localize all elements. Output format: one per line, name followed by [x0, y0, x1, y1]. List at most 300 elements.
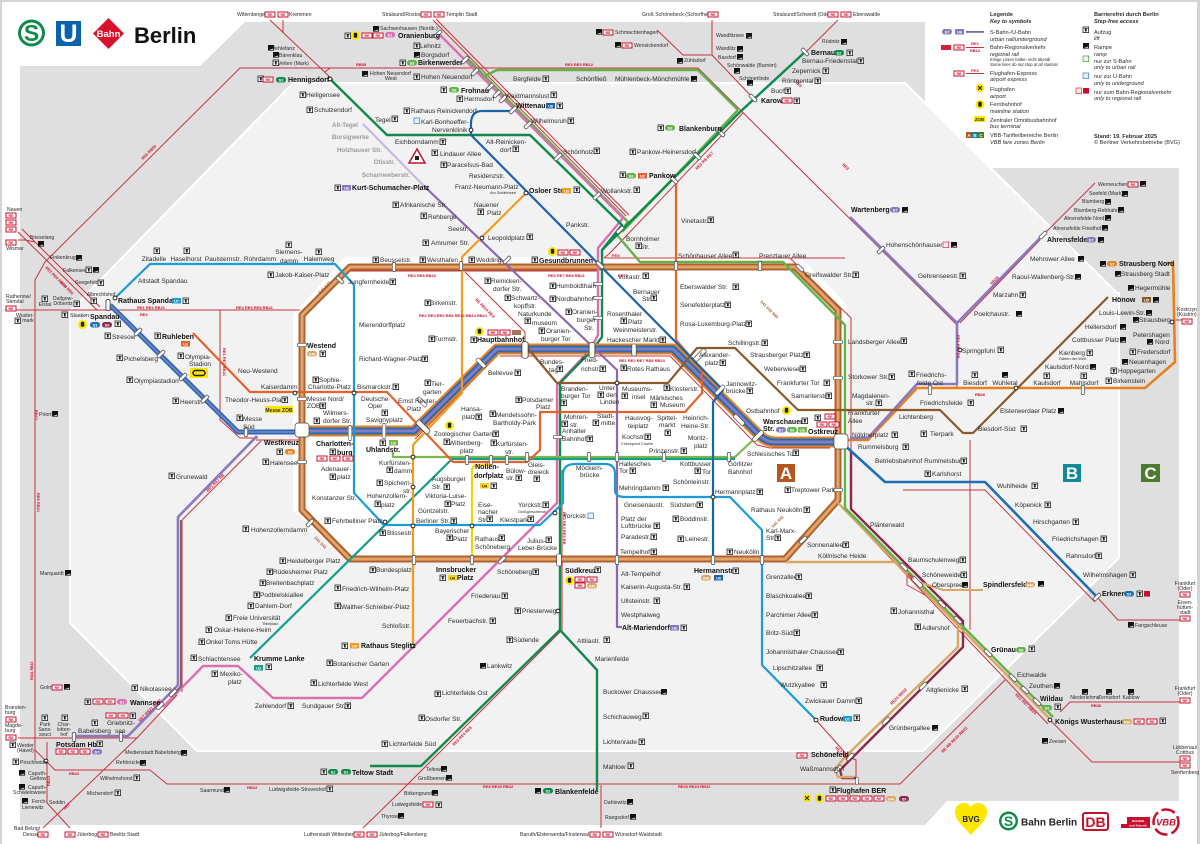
stations: north west outskirts: Wensickendorf — [634, 43, 669, 49]
stations: north west outskirts: Stendal — [6, 299, 24, 305]
legend: key to symbols: Some lines do not stop at all stations — [990, 62, 1059, 67]
stations: east: Blumberg-Rehhahn — [1074, 208, 1119, 214]
stations: east: Raoul-Wallenberg-Str. — [1012, 274, 1076, 281]
stations: inner west: tag — [549, 367, 558, 374]
stations: inner east: Museum — [660, 402, 685, 409]
stations: east: Hohenschönhausen — [886, 242, 944, 249]
legend: step-free access: Barrierefrei durch Berlin — [1094, 12, 1159, 18]
stations: south west: hof — [60, 732, 68, 738]
stations: north west outskirts: Bärenklau — [279, 53, 302, 59]
stations: inner west: Blissestr. — [387, 530, 413, 537]
stations: east: Mahlsdorf — [1070, 380, 1098, 387]
stations: Spandau and west: damm — [280, 258, 298, 265]
stations: south west: Babelsberg — [78, 728, 111, 735]
regional route labels: RE7 — [618, 273, 627, 278]
stations: south: Wutzkyallee — [780, 682, 815, 689]
stations: east: Strausberg Stadt — [1121, 271, 1170, 278]
stations: inner east: Klosterstr. — [670, 386, 699, 393]
line: S-Bahn Stadtbahn outer — [303, 349, 841, 442]
stations: inner east: Rathaus Neukölln — [751, 507, 803, 514]
stations: north west outskirts: Wandlitz — [716, 46, 736, 52]
stations: Spandau and west: Altstadt Spandau — [138, 278, 188, 285]
stations: Spandau and west: Spandau — [90, 314, 120, 321]
stations: north: Borgsdorf — [421, 52, 449, 59]
line: S8 south-east — [617, 235, 1053, 717]
stations: north west outskirts: West — [385, 76, 397, 82]
footer logos — [955, 803, 1178, 835]
legend: key to symbols: Flughafen-Express — [990, 71, 1037, 77]
stations: inner east: Alexander- — [699, 352, 730, 359]
line: U5 — [525, 297, 1108, 433]
stations: north: Wollankstr. — [601, 188, 633, 195]
stations: south west: Wilhelmshorst — [100, 776, 133, 782]
stations: inner east: Samariterstr. — [791, 393, 828, 400]
stations: south east: Fangschleuse — [1135, 623, 1167, 629]
stations: south: Alt-Tempelhof — [621, 571, 661, 578]
stations: south: Wünsdorf-Waldstadt — [615, 832, 662, 838]
stations: inner west: Platz — [451, 501, 465, 508]
stations: north: Scharnweberstr. — [362, 172, 410, 179]
stations: south west: Ferch- — [32, 799, 47, 805]
stations: inner west: platz — [337, 474, 351, 481]
stations: north: Eichborndamm — [395, 139, 439, 146]
stations: inner west: burger Tor — [541, 336, 571, 343]
regional route labels: RE2 RE7 RB24 — [1014, 692, 1038, 716]
stations: north: Wilhelmsruh — [531, 118, 567, 125]
stations: inner east: Ostkreuz — [808, 429, 838, 436]
fare zone letter C — [1141, 464, 1160, 483]
stations: south east: hütten- — [1177, 605, 1193, 611]
stations: east: Birkenstein — [1113, 378, 1146, 385]
stations: south west: Griebnitz- — [107, 720, 135, 727]
stations: north west outskirts: Döberitz — [53, 301, 73, 307]
stations: north west outskirts: Staaken — [70, 313, 89, 319]
logo: S-Bahn Berlin: S — [1004, 813, 1013, 829]
stations: south: Rangsdorf — [605, 815, 629, 821]
line: S3 west — [110, 305, 303, 432]
stations: south west: Rüdesheimer Platz — [273, 569, 328, 576]
stations: north: Buch — [771, 88, 786, 95]
stations: inner west: Oranien- — [572, 309, 597, 316]
stations: east: Ahrensfelde Friedhof — [1053, 226, 1102, 232]
legend: key to symbols: bus terminal — [990, 124, 1021, 130]
stations: inner east: Mehringdamm — [619, 485, 661, 492]
stations: south west: Ludwigsfelde-Struveshof — [269, 787, 326, 793]
stations: north: Zepernick — [792, 68, 821, 75]
stations: Spandau and west: Messe ZOB — [265, 408, 293, 414]
stations: south east: Niederlehme — [1070, 695, 1100, 701]
stations: north: Oranienburg — [398, 33, 440, 40]
stations: inner west: Viktoria-Luise- — [425, 493, 466, 500]
fare zone letter A: A — [780, 464, 792, 483]
warning triangle icon — [409, 149, 425, 163]
legend: key to symbols: Einige Linien halten nicht überall — [990, 57, 1050, 62]
regional route labels: RE3 RE4 RE5 — [451, 725, 473, 747]
stations: inner west: Reinicken- — [491, 278, 522, 285]
line: U2 — [193, 183, 702, 462]
stations: inner west: Spichern- — [384, 480, 412, 487]
stations: north: Heiligensee — [306, 92, 340, 99]
stations: inner east: Branden- — [561, 386, 588, 393]
stations: south east: Eisen- — [1178, 600, 1193, 606]
stations: inner east: mitte — [601, 420, 615, 427]
stations: north: Schönholz — [563, 149, 593, 156]
regional route labels: RE20 RE24 RB32 — [678, 784, 711, 789]
stations: north west outskirts: Schönerlinde — [739, 76, 769, 82]
stations: Spandau and west: Ruhleben — [162, 334, 194, 341]
stations: inner east: Rotes Rathaus — [627, 366, 671, 373]
stations: east: Mehrower Allee — [1030, 256, 1075, 263]
stations: south west: lotten- — [57, 727, 71, 733]
stations: south west: Schwielowsee — [13, 790, 46, 796]
stations: north: Prenzlauer Allee — [759, 253, 807, 260]
line: S8 north — [467, 60, 738, 110]
stations: north: Otisstr. — [374, 159, 395, 166]
stations: south: Friedenau — [471, 593, 501, 600]
stations: north: Birkenwerder — [418, 60, 463, 67]
stations: north: Platz — [487, 210, 501, 217]
stations: south: Zwickauer Damm — [805, 698, 856, 705]
line: U9 — [413, 193, 526, 645]
stations: south: Lichterfelde Süd — [389, 741, 436, 748]
stations: north west outskirts: mark — [22, 318, 34, 324]
stations: inner west: kopffstr. — [514, 303, 537, 310]
stations: south: Lipschitzallee — [773, 665, 812, 672]
line: U3 — [250, 459, 735, 658]
stations: inner west: Bartholdy-Park — [493, 420, 537, 427]
logo: Bahn diamond — [93, 18, 124, 49]
legend: key to symbols: A — [967, 133, 971, 138]
stations: north: Karow — [761, 98, 783, 105]
stations: east: Strausberg — [1139, 317, 1171, 324]
stations: east: Lichtenberg — [899, 414, 933, 421]
stations: south: Lichtenrade — [603, 739, 637, 746]
stations: inner west: Hauptbahnhof — [477, 337, 525, 344]
stations: north west outskirts: Falkensee — [63, 268, 87, 274]
stations: east: Frankfurter — [848, 410, 881, 417]
stations: north west outskirts: Wittenberge — [237, 12, 265, 18]
stations: inner west: Eise- — [478, 502, 493, 509]
stations: inner west: Str. — [432, 484, 442, 491]
fare zone letter B — [1063, 464, 1081, 483]
legend: step-free access: ramp — [1094, 52, 1107, 58]
regional route labels: RE24 RB22 — [889, 687, 908, 706]
stations: south: Teltow — [426, 767, 441, 773]
logo: Bahn diamond: Bahn — [97, 29, 121, 40]
stations: south east: Oberspree — [932, 582, 963, 589]
stations: north: Afrikanische Str. — [400, 202, 447, 209]
line: S1 — [163, 33, 623, 707]
stations: east: Hegermühle — [1135, 285, 1171, 292]
stations: east: str. — [866, 400, 875, 407]
stations: inner east: Sonnenallee — [807, 542, 844, 549]
stations: inner east: Platz — [628, 319, 642, 326]
stations: inner east: Checkpoint Charlie — [621, 442, 653, 446]
stations: south east: Karlshorst — [932, 471, 961, 478]
stations: north: Rehberge — [428, 214, 457, 221]
stations: south west: see — [115, 728, 126, 735]
logo: Mobilität Verkehrsverbund: und Zukunft — [1129, 824, 1147, 828]
stations: south east: Hirschgarten — [1033, 519, 1070, 526]
stations: inner west: Deutsche — [361, 396, 389, 403]
stations: south east: Königs Wusterhausen — [1055, 719, 1129, 726]
stations: south west: Werder — [17, 743, 34, 749]
stations: south east: Baumschulenweg — [908, 557, 960, 564]
stations: south east: Zernsdorf — [1098, 695, 1121, 701]
stations: south west: Krumme Lanke — [254, 656, 305, 663]
stations: inner east: markt — [659, 422, 675, 429]
regional route labels: RB23 — [46, 775, 51, 786]
legend: step-free access: Rampe — [1094, 45, 1112, 51]
stations: Spandau and west: Paulsternstr. — [205, 256, 241, 263]
stations: Spandau and west: Halensee — [270, 460, 298, 467]
stations: inner east: Hallesches — [619, 461, 652, 468]
stations: south: Buckower Chaussee — [603, 689, 663, 696]
logo: VBB: VBB — [1156, 818, 1176, 828]
line: U8 — [471, 111, 723, 560]
stations: inner west: damm — [394, 468, 412, 475]
stations: inner east: Tempelhof — [620, 549, 650, 556]
stations: south east: (Oder) — [1178, 586, 1193, 592]
stations: south: Hermannstr. — [694, 568, 735, 575]
stations: Spandau and west: Halemweg — [304, 256, 335, 263]
regional route labels: RE7 — [62, 801, 72, 811]
stations: south east: Altglienicke — [926, 687, 959, 694]
legend: key to symbols: Fernbahnhof — [990, 102, 1022, 108]
stations: inner west: Wittenberg- — [449, 440, 483, 447]
stations: south west: Caputh- — [28, 785, 47, 791]
stations: south west: Potsdam Hbf — [56, 742, 100, 749]
regional route labels: RE8 RB21 — [36, 493, 41, 513]
stations: south: Schichauweg — [603, 714, 642, 721]
stations: south west: Medienstadt Babelsberg — [125, 750, 181, 756]
stations: inner east: Frankfurter Tor — [777, 380, 820, 387]
stations: south east: Friedrichshagen — [1052, 536, 1099, 543]
stations: east: Wartenberg — [851, 207, 890, 214]
stations: south: Südende — [513, 637, 539, 644]
stations: inner west: Bundes- — [540, 359, 564, 366]
stations: north: Bernau — [811, 50, 835, 57]
stations: inner west: Tier- — [431, 381, 444, 388]
stations: inner west: str. — [506, 475, 515, 482]
stations: inner west: Platz — [407, 406, 421, 413]
stations: north: Waidmannslust — [505, 93, 549, 100]
stations: north: Wedding — [476, 257, 502, 264]
stations: east — [848, 181, 1197, 438]
stations: inner west: str. — [403, 488, 412, 495]
regional route labels: RE4 RE6 RE8 RB21 — [236, 305, 274, 310]
regional route labels: RE2 RE8 RB10 — [44, 265, 68, 289]
regional route labels: RE1 RE2 RE7 RE8 RB23 — [619, 358, 666, 363]
stations: north: Osloer Str. — [529, 188, 564, 195]
stations: inner west: Schwartz- — [511, 295, 540, 302]
stations: north: Lehnitz — [420, 43, 441, 50]
regional route labels: RB55 — [356, 62, 367, 67]
stations: inner west: Nordbahnhof — [556, 296, 594, 303]
stations: inner west: Str. — [478, 517, 488, 524]
stations: inner east: burger Tor — [561, 393, 591, 400]
stations: north west outskirts: Rüdnitz — [822, 39, 840, 45]
stations: east: Hellersdorf — [1085, 324, 1117, 331]
fare zone letter A — [777, 464, 795, 483]
stations: south east: Senftenberg — [1171, 770, 1199, 776]
regional route labels: RE3 — [841, 162, 851, 172]
stations: north west outskirts: Golm — [40, 685, 52, 691]
stations: east: Werneuchen — [1098, 182, 1127, 188]
logo: DB: DB — [1085, 814, 1106, 830]
stations: north west outskirts: Nauen — [7, 207, 22, 213]
stations: south east: Johannisthal — [898, 609, 935, 616]
stations: Spandau and west: Grunewald — [176, 474, 208, 481]
stations: south east: Frankfurt — [1175, 581, 1196, 587]
stations: north west outskirts: Dallgow- — [53, 296, 73, 302]
legend: key to symbols: Key to symbols — [990, 19, 1031, 25]
stations: north west outskirts: Finkenkrug — [50, 255, 76, 261]
stations: inner east: Südstern — [670, 502, 696, 509]
stations: inner east: Prinzenstr. — [649, 448, 680, 455]
stations: south: Alt-Mariendorf — [622, 625, 670, 632]
legend: step-free access: Stand: 19. Februar 2025 — [1094, 134, 1157, 140]
stations: inner east: Gneisenaustr. — [624, 502, 664, 509]
stations: south west: souci — [39, 732, 51, 738]
stations: inner east: Bernauer — [633, 289, 661, 296]
stations: south west: Pirschheide — [20, 760, 47, 766]
stations: inner east: Rosa-Luxemburg-Platz — [680, 321, 746, 328]
stations: south east: Cottbus — [1176, 750, 1194, 756]
stations: south west: Seddin — [49, 800, 65, 806]
stations: east: felde Ost — [917, 380, 943, 387]
regional route labels: RE7 RB21 RB22 — [137, 697, 163, 723]
stations: Spandau and west: Stresow — [112, 334, 136, 341]
stations: inner east: Fried- — [581, 357, 598, 364]
stations: east: Biesdorf — [963, 380, 987, 387]
stations: south east: Nöldnerplatz — [852, 432, 888, 439]
stations: inner west: Mendelssohn- — [496, 412, 537, 419]
stations: inner west: Augsburger — [432, 476, 466, 483]
stations: east: Ahrensfelde — [1047, 237, 1088, 244]
stations: south west: Schlachtensee — [198, 656, 241, 663]
stations: inner west: Charlotten- — [316, 441, 354, 448]
stations: inner west: Jungfernheide — [348, 279, 390, 286]
stations: north: Bornholmer — [626, 236, 660, 243]
stations: inner west: Richard-Wagner-Platz — [359, 356, 423, 363]
stations: north west outskirts: Albrechtshof — [87, 292, 116, 298]
stations: inner east: Hausvog- — [625, 415, 653, 422]
stations: south: Schöneberg — [497, 569, 532, 576]
legend: step-free access: nur zum Bahn-Regionalverkehr — [1094, 90, 1172, 96]
stations: south: Thyrow — [381, 814, 398, 820]
stations: inner east: brücke — [580, 472, 600, 479]
regional route labels: S41 S42 — [317, 280, 332, 295]
stations: Spandau and west: Haselhorst — [170, 256, 202, 263]
stations: east: Neuenhagen — [1129, 359, 1167, 366]
stations: inner east: platz — [694, 443, 708, 450]
stations: south: Baruth/Elsterwerda/Finsterwalde — [520, 832, 595, 838]
stations: north west outskirts: Rathenow/ — [6, 294, 31, 300]
stations: north: Karl-Bonhoeffer- — [421, 119, 469, 126]
stations: north: Holzhauser Str. — [337, 147, 382, 154]
stations: inner east: Görlitzer — [728, 461, 753, 468]
stations: south: Attilastr. — [577, 638, 600, 645]
stations: north west outskirts: Wismar — [6, 246, 24, 252]
stations: south: Birkengrund — [404, 791, 432, 797]
stations: north west outskirts: Vehlefanz — [272, 46, 295, 52]
stations: north west outskirts: Hohen Neuendorf — [370, 71, 412, 77]
stations: east: Tierpark — [930, 431, 954, 438]
stations: south east: Schönefeld — [811, 752, 849, 759]
stations: north: Schulzendorf — [314, 107, 352, 114]
stations: north: Hermsdorf — [464, 96, 495, 103]
stations: east: Springpfuhl — [962, 348, 995, 355]
stations: inner west: Julius- — [527, 538, 546, 545]
line: S7 Ahrensfelde — [850, 235, 1043, 438]
stations: inner east: den — [606, 392, 617, 399]
stations: north: Hohen Neuendorf — [421, 74, 473, 81]
stations: south west: Bad Belzig/ — [14, 826, 41, 832]
stations: inner east: Luftbrücke — [621, 523, 652, 530]
regional route labels: RE RB10 RE3 — [474, 297, 497, 319]
stations: inner west: platz — [462, 414, 476, 421]
stations: north: Am Schäfersee — [490, 191, 516, 195]
stations: south: Botanischer Garten — [333, 661, 389, 668]
stations: north west outskirts: Kremmen — [289, 12, 312, 18]
stations: south: Westphalweg — [621, 612, 660, 619]
stations: inner east: Heine-Str. — [681, 423, 710, 430]
legend: key to symbols: airport — [990, 94, 1006, 100]
stations: north west outskirts: Sachsenhausen (Nordb.) — [380, 26, 438, 32]
stations: south east: Betriebsbahnhof Rummelsburg — [875, 458, 965, 465]
stations: inner east: platz — [705, 360, 719, 367]
stations: Spandau and west — [78, 242, 335, 534]
stations: inner east: Jannowitz- — [726, 381, 757, 388]
stations: inner east: richstr. — [581, 366, 600, 373]
line: S46 — [838, 503, 1050, 719]
stations: Spandau and west: Kaiserdamm — [261, 384, 297, 391]
stations: south east: (Oder) — [1178, 691, 1193, 697]
stations: north west outskirts: Stralsund/Rostock — [382, 12, 425, 18]
stations: inner west: Konstanzer Str. — [312, 495, 357, 502]
stations: south west: Magde- — [5, 723, 23, 729]
stations: south east: Zeuthen — [1029, 683, 1053, 690]
stations: inner east: Bahnhof — [728, 469, 752, 476]
stations: east: Wuhletal — [992, 380, 1018, 387]
stations: inner west — [307, 278, 597, 552]
stations: inner west: Uhlandstr. — [366, 447, 400, 454]
stations: inner east: Hackescher Markt — [607, 337, 660, 344]
line: U4 — [472, 465, 490, 557]
stations: inner west: Bayerischer — [435, 528, 470, 535]
stations: south east: Adlershof — [922, 625, 950, 632]
stations: north west outskirts: Brieselang — [30, 235, 54, 241]
stations: south: Feuerbachstr. — [448, 618, 488, 625]
legend: key to symbols: Zentraler Omnibusbahnhof — [990, 118, 1057, 124]
stations: inner east: insel — [632, 394, 646, 401]
regional route labels: RB22 — [69, 771, 80, 776]
stations: south west: Onkel Toms Hütte — [206, 639, 258, 646]
stations: inner east: Museums- — [622, 386, 652, 393]
stations: north: Röntgental — [782, 78, 814, 85]
stations: east: Kaulsdorf — [1033, 380, 1061, 387]
stations: inner east: Strausberger Platz — [750, 352, 804, 359]
stations: east: Elsterwerdaer Platz — [1000, 408, 1056, 415]
stations: inner west: Yorckstr. — [518, 502, 543, 509]
stations: south west: burg — [5, 710, 15, 716]
stations: inner east: Kottbusser — [680, 461, 712, 468]
regional route labels: RE1 RE7 RB21 — [222, 348, 227, 377]
stations: Spandau and west: Rohrdamm — [244, 256, 276, 263]
regional route labels: RE4 RE8 RB10 — [408, 273, 437, 278]
stations: inner west: Fehrbelliner Platz — [332, 518, 383, 525]
